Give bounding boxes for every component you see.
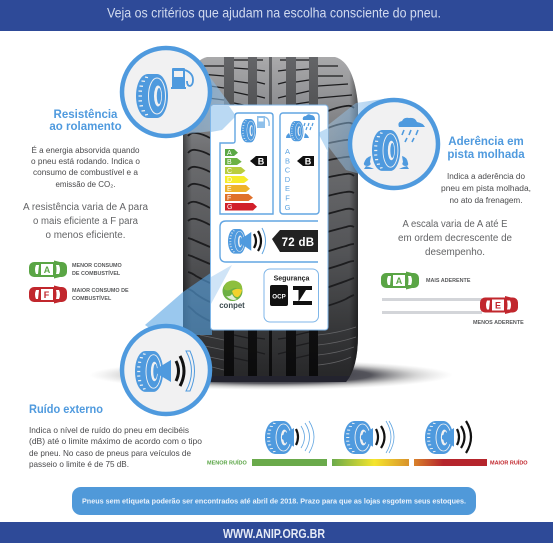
text: wet grip description: pneu em pista molhada,: [441, 184, 531, 193]
text: rolling resistance scale: [23, 202, 148, 241]
noise icon: medium: [344, 421, 394, 454]
energy bars A-G: C: [227, 168, 232, 175]
energy bars A-G: A: [227, 150, 232, 157]
text: wet grip scale: A escala varia de A até E: [402, 219, 508, 230]
braking tracks: [382, 298, 482, 314]
text: wet grip description: no ato da frenagem.: [450, 196, 522, 205]
car A: lower fuel use: MENOR CONSUMO: [72, 263, 122, 269]
text: rolling resistance description: o pneu está rodando. Indica o: [31, 157, 141, 166]
wet grip rating box: A: [285, 147, 290, 156]
car F: higher fuel use: F: [44, 290, 50, 300]
heading: wet grip: [447, 136, 525, 161]
noise scale bar: [207, 458, 528, 466]
highlight wedge: wet grip: [318, 98, 390, 180]
wet grip rating box: B: [285, 156, 290, 166]
heading: rolling resistance: Resistência: [54, 109, 118, 121]
text: rolling resistance scale: o mais eficiente a F para: [33, 216, 138, 227]
noise icon: low: [265, 421, 314, 454]
text: wet grip scale: em ordem decrescente de: [398, 233, 512, 244]
text: rolling resistance scale: A resistência varia de A para: [23, 202, 148, 213]
safety certification box: [264, 269, 318, 322]
text: external noise description: (dB) até o limite máximo de acordo com o tipo: [29, 437, 202, 446]
callout: tires without label: Pneus sem etiqueta poderão ser encontrados até abril de 2018. Prazo para que as lojas esgotem seus estoques.: [82, 496, 466, 506]
noise rating box: [220, 221, 318, 262]
footer band: WWW.ANIP.ORG.BR: [223, 527, 325, 541]
text: wet grip description: [441, 172, 531, 205]
wet grip rating box: F: [285, 194, 290, 202]
car A: lower fuel use: [29, 260, 122, 278]
energy bars A-G: B: [227, 159, 232, 166]
heading: wet grip: pista molhada: [447, 149, 525, 161]
car A: lower fuel use: DE COMBUSTÍVEL: [72, 269, 121, 277]
text: rolling resistance description: consumo de combustível e a: [33, 168, 139, 177]
highlight wedge: rolling resistance: [168, 58, 240, 136]
circle icon: wet grip: [350, 100, 438, 188]
wet grip rating box: E: [285, 184, 290, 193]
callout: tires without label: [72, 487, 476, 515]
wet grip rating box: [280, 113, 319, 214]
energy bars A-G: G: [227, 204, 232, 211]
car A: more grip: A: [396, 276, 403, 286]
car F: higher fuel use: COMBUSTÍVEL: [72, 294, 112, 302]
noise icon: high: [425, 421, 471, 454]
conpet logo: [219, 280, 245, 310]
heading: rolling resistance: [49, 109, 122, 133]
footer band: [0, 522, 553, 543]
heading: wet grip: Aderência em: [448, 136, 524, 148]
safety certification box: Segurança: [274, 276, 310, 282]
car F: higher fuel use: MAIOR CONSUMO DE: [72, 288, 129, 294]
wet grip rating box: D: [285, 175, 291, 184]
header band: Veja os critérios que ajudam na escolha consciente do pneu.: [107, 4, 441, 20]
energy bars A-G: D: [227, 177, 232, 184]
text: rolling resistance description: [31, 146, 141, 189]
car F: higher fuel use: [29, 286, 129, 304]
text: external noise description: passeio o limite é de 75 dB.: [29, 460, 129, 469]
safety certification box: OCP: [272, 294, 286, 300]
energy bars A-G: [225, 149, 257, 211]
rolling resistance rating box: [220, 113, 273, 214]
energy bars A-G: F: [227, 195, 231, 202]
header band: [0, 0, 553, 31]
heading: rolling resistance: ao rolamento: [49, 121, 122, 133]
circle icon: rolling resistance: [122, 48, 210, 136]
car A: more grip: [381, 272, 471, 290]
text: external noise description: [29, 426, 202, 469]
noise scale bar: MENOR RUÍDO: [207, 458, 247, 466]
energy bars A-G: E: [227, 186, 232, 193]
label panel: [210, 105, 328, 330]
highlight wedge: noise: [145, 272, 212, 335]
text: rolling resistance description: emissão de CO₂.: [56, 180, 116, 189]
text: wet grip scale: [398, 219, 512, 258]
text: wet grip scale: desempenho.: [425, 247, 485, 258]
car A: more grip: MAIS ADERENTE: [426, 278, 471, 284]
text: rolling resistance scale: o menos eficiente.: [46, 230, 126, 241]
wet grip rating box: G: [285, 203, 291, 212]
text: external noise description: de pneu. No caso de pneus para veículos de: [29, 449, 191, 458]
text: rolling resistance description: É a energia absorvida quando: [32, 146, 140, 155]
car E: less grip: MENOS ADERENTE: [473, 320, 524, 326]
rating tag B: B: [258, 156, 265, 166]
car E: less grip: E: [495, 300, 501, 310]
text: wet grip description: Indica a aderência do: [447, 172, 526, 181]
noise rating box: 72 dB: [282, 237, 314, 249]
car E: less grip: [473, 296, 524, 326]
rating tag B: B: [305, 156, 312, 166]
text: external noise description: Indica o nível de ruído do pneu em decibéis: [29, 426, 189, 435]
car A: lower fuel use: A: [44, 265, 51, 275]
tire photograph: [89, 55, 453, 390]
circle icon: external noise: [122, 326, 210, 414]
noise scale bar: MAIOR RUÍDO: [490, 458, 528, 466]
wet grip rating box: C: [285, 166, 291, 174]
conpet logo: conpet: [219, 301, 245, 310]
heading: external noise: Ruído externo: [29, 404, 103, 416]
